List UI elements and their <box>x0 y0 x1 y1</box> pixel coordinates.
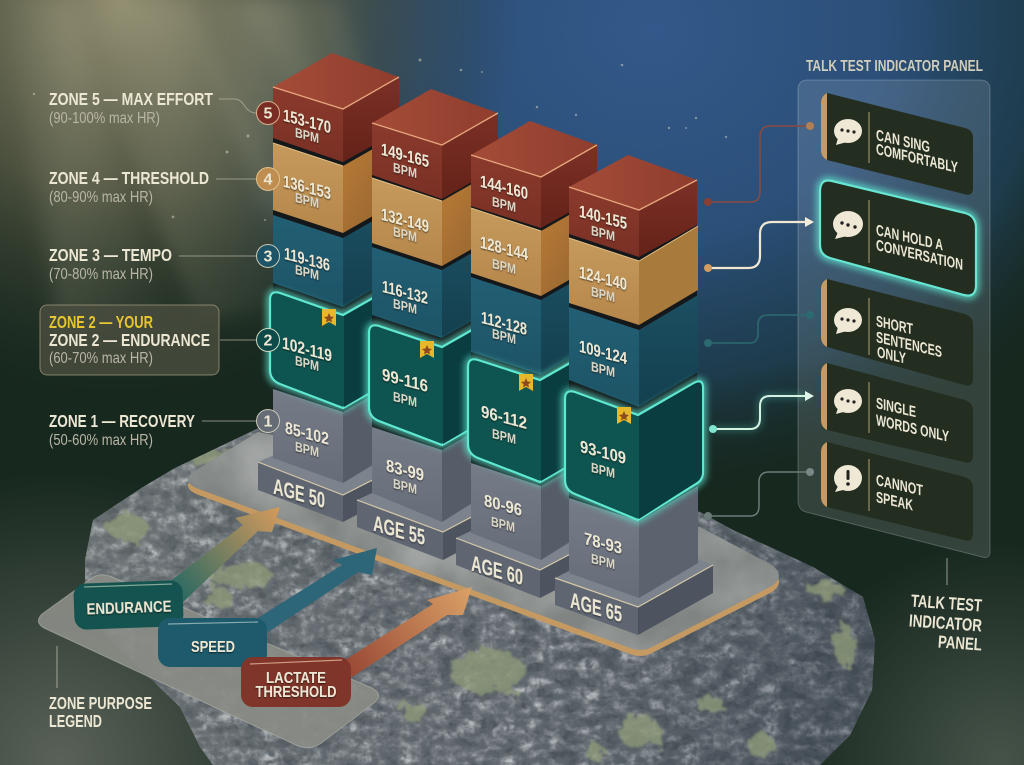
card: can hold a conversation (highlighted) <box>820 180 976 296</box>
block: zone 2 age 55 <box>369 309 509 445</box>
values: age 60: BPM <box>491 514 515 535</box>
values: age 55: 149-165 <box>381 139 429 171</box>
talk test caption: TALK TEST <box>910 591 983 616</box>
card: can sing comfortably: COMFORTABLY <box>876 141 958 177</box>
icon: speech bubble <box>834 119 862 145</box>
card: can sing comfortably <box>821 93 973 195</box>
legend caption <box>49 646 152 731</box>
column: age 65 <box>555 155 713 635</box>
block: zone 5 age 50 <box>273 53 399 162</box>
values: age 65: 93-109 <box>580 436 626 468</box>
label: zone 2: ZONE 2 — ENDURANCE <box>49 330 210 350</box>
star tag: age 55 <box>420 341 434 358</box>
card: short sentences only: SENTENCES <box>876 329 942 361</box>
icon: speech bubble <box>834 308 862 334</box>
base: age 55: AGE 55 <box>373 511 425 550</box>
legend pill: lactate threshold <box>241 657 351 707</box>
star tag: age 60 <box>519 374 533 391</box>
block: zone 3 age 65 <box>569 295 698 407</box>
talk test caption <box>908 558 983 655</box>
badge 2 <box>256 328 280 352</box>
badge 2: 2 <box>264 332 273 350</box>
card: short sentences only: ONLY <box>877 344 906 368</box>
values: age 65: BPM <box>591 284 615 305</box>
connector: zone 1 to cannot speak <box>704 468 814 520</box>
label: zone 3: (70-80% max HR) <box>49 266 153 283</box>
values: age 55: 83-99 <box>386 455 424 485</box>
card: can hold a conversation (highlighted): CONVERSATION <box>876 237 963 274</box>
rock outcrop <box>85 428 875 765</box>
block: zone 3 age 55 <box>372 238 498 338</box>
values: age 55: BPM <box>393 389 417 410</box>
values: age 65: BPM <box>591 223 615 244</box>
badge 3 <box>256 244 280 268</box>
block: zone 1 age 65 <box>569 486 698 598</box>
base: age 55 <box>357 460 527 560</box>
arrow: lactate threshold <box>345 587 472 677</box>
connector: zone 5 to sing <box>704 122 814 206</box>
zone purpose legend plate <box>38 575 379 748</box>
star tag: age 65 <box>617 407 631 424</box>
values: age 55: BPM <box>393 224 417 245</box>
values: age 50: BPM <box>295 125 319 146</box>
values: age 65: 140-155 <box>579 201 627 233</box>
card: cannot speak: CANNOT <box>876 472 923 500</box>
badge 4: 4 <box>264 172 273 188</box>
zone number badges <box>256 102 280 432</box>
values: age 65: BPM <box>591 359 615 380</box>
values: age 60: 96-112 <box>481 401 527 433</box>
values: age 60: 112-128 <box>481 307 527 339</box>
block: zone 2 age 60 <box>468 342 607 482</box>
stacked zone columns <box>258 53 713 635</box>
values: age 65: BPM <box>591 551 615 572</box>
values: age 60: 128-144 <box>480 232 528 264</box>
card: cannot speak <box>821 442 973 541</box>
values: age 50 <box>282 105 332 460</box>
legend pill: endurance <box>73 580 184 630</box>
talk test panel <box>798 80 990 557</box>
talk test caption: PANEL <box>937 631 983 655</box>
label: zone 5: ZONE 5 — MAX EFFORT <box>49 89 213 109</box>
block: zone 4 age 60 <box>471 199 597 296</box>
block: zone 2 age 65 <box>565 381 703 520</box>
values: age 65 <box>579 201 627 572</box>
connector: zone 4 to conversation <box>704 217 814 272</box>
values: age 50: BPM <box>295 353 319 374</box>
highlight box: zone 2 <box>40 305 219 375</box>
card: can hold a conversation (highlighted): CAN HOLD A <box>876 222 943 254</box>
values: age 55: 116-132 <box>382 276 428 308</box>
label: zone 4: (80-90% max HR) <box>49 189 153 206</box>
block: zone 1 age 50 <box>273 380 399 483</box>
values: age 55: BPM <box>393 296 417 317</box>
values: age 55 <box>381 139 429 497</box>
legend caption: ZONE PURPOSE <box>49 693 152 713</box>
label: zone 1: (50-60% max HR) <box>49 432 153 449</box>
star tag: age 50 <box>322 309 336 326</box>
base: age 50 <box>258 425 428 522</box>
connector: zone 3 to short sentences <box>704 311 814 347</box>
values: age 55: 99-116 <box>382 364 428 396</box>
card: short sentences only: SHORT <box>876 313 913 339</box>
label: zone 3: ZONE 3 — TEMPO <box>49 245 172 265</box>
legend pill: lactate threshold: LACTATE <box>266 670 326 687</box>
icon: speech bubble <box>834 389 862 414</box>
values: age 50: BPM <box>295 262 319 283</box>
label: zone 5 <box>49 89 256 127</box>
values: age 60: 80-96 <box>484 490 522 520</box>
values: age 60 <box>480 171 528 535</box>
block: zone 1 age 60 <box>471 454 597 560</box>
label: zone 4 <box>49 168 256 206</box>
badge 4 <box>256 168 280 190</box>
values: age 50: BPM <box>295 439 319 460</box>
badge 5: 5 <box>264 106 273 122</box>
base: age 65 <box>555 535 713 635</box>
label: zone 2: (60-70% max HR) <box>49 350 153 367</box>
values: age 65: BPM <box>591 460 615 481</box>
talk test caption: INDICATOR <box>908 610 983 636</box>
block: zone 4 age 50 <box>273 134 399 233</box>
label: zone 4: ZONE 4 — THRESHOLD <box>49 168 209 188</box>
block: zone 5 age 60 <box>471 121 597 228</box>
block: zone 4 age 65 <box>569 226 698 325</box>
arrow: speed <box>258 548 377 632</box>
glass platform <box>180 430 790 656</box>
block: zone 3 age 50 <box>273 206 399 307</box>
label: zone 3 <box>49 245 256 283</box>
card: cannot speak: SPEAK <box>876 489 913 515</box>
values: age 50: BPM <box>295 190 319 211</box>
label: zone 2 <box>49 312 256 367</box>
connector: zone 2 to single words <box>709 391 814 433</box>
values: age 50: 136-153 <box>283 171 331 203</box>
badge 5 <box>256 102 280 124</box>
label: zone 1: ZONE 1 — RECOVERY <box>49 411 195 431</box>
block: zone 5 age 65 <box>569 155 697 257</box>
base: age 50: AGE 50 <box>273 474 325 513</box>
base: age 65: AGE 65 <box>570 588 622 627</box>
legend caption: LEGEND <box>49 711 102 731</box>
label: zone 1 <box>49 411 256 449</box>
values: age 65: 124-140 <box>579 262 627 294</box>
values: age 65: 109-124 <box>579 336 627 368</box>
values: age 60: 144-160 <box>480 171 528 203</box>
values: age 50: 102-119 <box>282 333 332 366</box>
icon: alert bubble <box>834 465 862 492</box>
block: zone 4 age 55 <box>372 169 498 266</box>
badge 1 <box>256 410 280 432</box>
zone labels <box>40 89 256 449</box>
label: zone 2: ZONE 2 — YOUR <box>49 312 153 332</box>
values: age 65: 78-93 <box>584 528 622 558</box>
values: age 50: 119-136 <box>284 243 330 275</box>
column: age 55 <box>357 89 527 560</box>
badge 1: 1 <box>264 414 273 430</box>
card: single words only <box>821 363 973 463</box>
column: age 60 <box>456 121 625 598</box>
card: can sing comfortably: CAN SING <box>876 127 930 156</box>
base: age 60 <box>456 498 625 598</box>
values: age 55: BPM <box>393 160 417 181</box>
values: age 50: 153-170 <box>283 105 331 137</box>
block: zone 3 age 60 <box>471 268 597 375</box>
values: age 55: 132-149 <box>381 204 429 236</box>
badge 3: 3 <box>264 248 273 266</box>
legend pill: endurance: ENDURANCE <box>86 599 172 618</box>
column: age 50 <box>258 53 428 522</box>
block: zone 5 age 55 <box>372 89 498 199</box>
values: age 50: 85-102 <box>285 417 329 449</box>
legend pill: speed: SPEED <box>191 639 235 656</box>
values: age 60: BPM <box>492 194 516 215</box>
values: age 60: BPM <box>492 426 516 447</box>
values: age 55: BPM <box>393 476 417 497</box>
card: single words only: WORDS ONLY <box>876 412 949 446</box>
icon: speech bubble <box>833 211 863 239</box>
label: zone 5: (90-100% max HR) <box>49 110 160 127</box>
card: short sentences only <box>821 279 973 386</box>
base: age 60: AGE 60 <box>471 551 523 590</box>
block: zone 1 age 55 <box>372 418 498 522</box>
values: age 60: BPM <box>492 256 516 277</box>
legend pill: lactate threshold: THRESHOLD <box>256 684 336 701</box>
block: zone 2 age 50 <box>270 277 410 408</box>
card: single words only: SINGLE <box>876 395 916 421</box>
values: age 60: BPM <box>492 326 516 347</box>
arrow: endurance <box>168 507 280 602</box>
legend pill: speed <box>158 618 267 667</box>
